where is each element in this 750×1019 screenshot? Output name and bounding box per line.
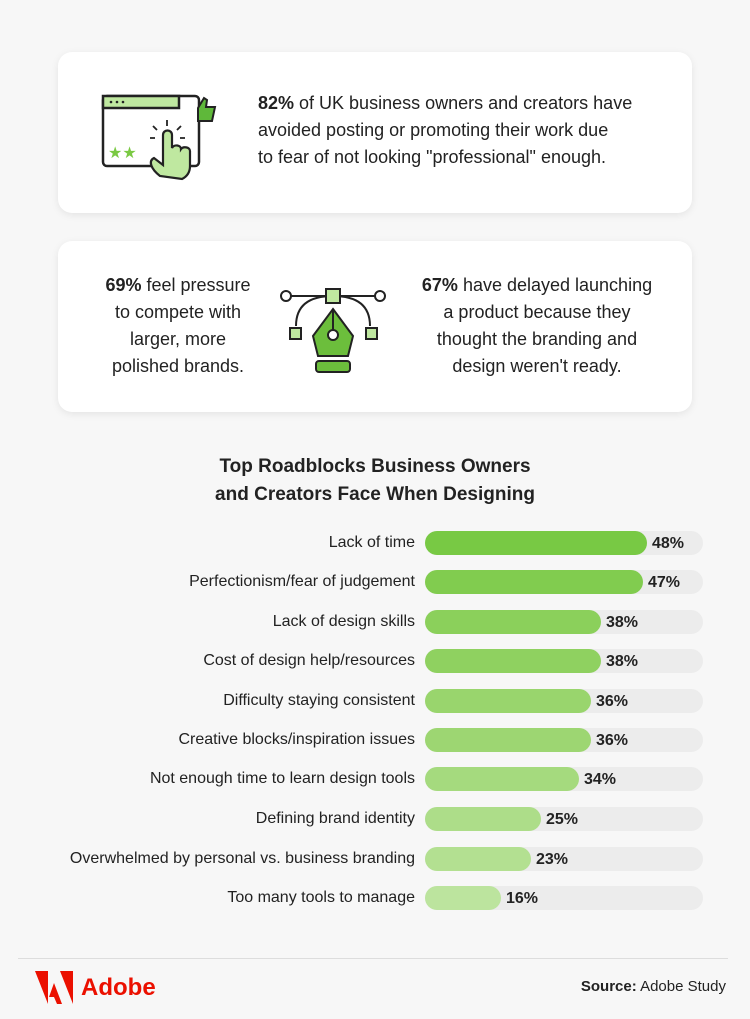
bar chart: 23% [536,851,568,868]
card 1 [58,52,692,213]
logo: Adobe: Adobe [81,974,156,1001]
bar chart: 47% [648,574,680,591]
bar chart: Not enough time to learn design tools [150,770,415,787]
bar chart: Overwhelmed by personal vs. business branding [70,850,415,867]
text: 82% stat: to fear of not looking "professional" enough. [258,147,606,167]
chart title [215,456,535,505]
icon: browser with hand [102,94,216,180]
bar chart: 38% [606,653,638,670]
card 2 [58,241,692,412]
chart title: and Creators Face When Designing [215,484,535,505]
bar chart [70,531,703,910]
text: 82% stat: avoided posting or promoting their work due [258,120,608,140]
text: 67% stat: a product because they [443,302,631,322]
bar chart: Cost of design help/resources [203,652,415,669]
bar chart: Perfectionism/fear of judgement [189,573,415,590]
bar chart: 48% [652,535,684,552]
bar chart: Lack of design skills [273,613,415,630]
bar chart: Difficulty staying consistent [223,692,415,709]
text: 69% stat: polished brands. [112,356,244,376]
bar chart: Lack of time [329,534,415,551]
bar chart: Too many tools to manage [227,889,415,906]
source: Source: Adobe Study [581,978,726,995]
chart title: Top Roadblocks Business Owners [219,456,531,477]
text: 69% stat: 69% feel pressure [105,275,251,295]
bar chart: 16% [506,890,538,907]
text: 69% stat: to compete with [115,302,241,322]
bar chart: Defining brand identity [256,810,415,827]
icon: browser with hand: ★★ [108,145,137,162]
text: 67% stat [422,275,652,376]
bar chart: 34% [584,771,616,788]
text: 69% stat [105,275,251,376]
text: 69% stat: larger, more [130,329,226,349]
bar chart: 36% [596,732,628,749]
icon: pen tool [280,288,386,373]
bar chart: Creative blocks/inspiration issues [178,731,415,748]
bar chart: 38% [606,614,638,631]
text: 67% stat: design weren't ready. [452,356,622,376]
logo: Adobe [35,971,156,1004]
bar chart: 36% [596,693,628,710]
bar chart: 25% [546,811,578,828]
text: 82% stat: 82% of UK business owners and creators have [258,93,632,113]
text: 82% stat [258,93,632,167]
text: 67% stat: 67% have delayed launching [422,275,652,295]
text: 67% stat: thought the branding and [437,329,637,349]
